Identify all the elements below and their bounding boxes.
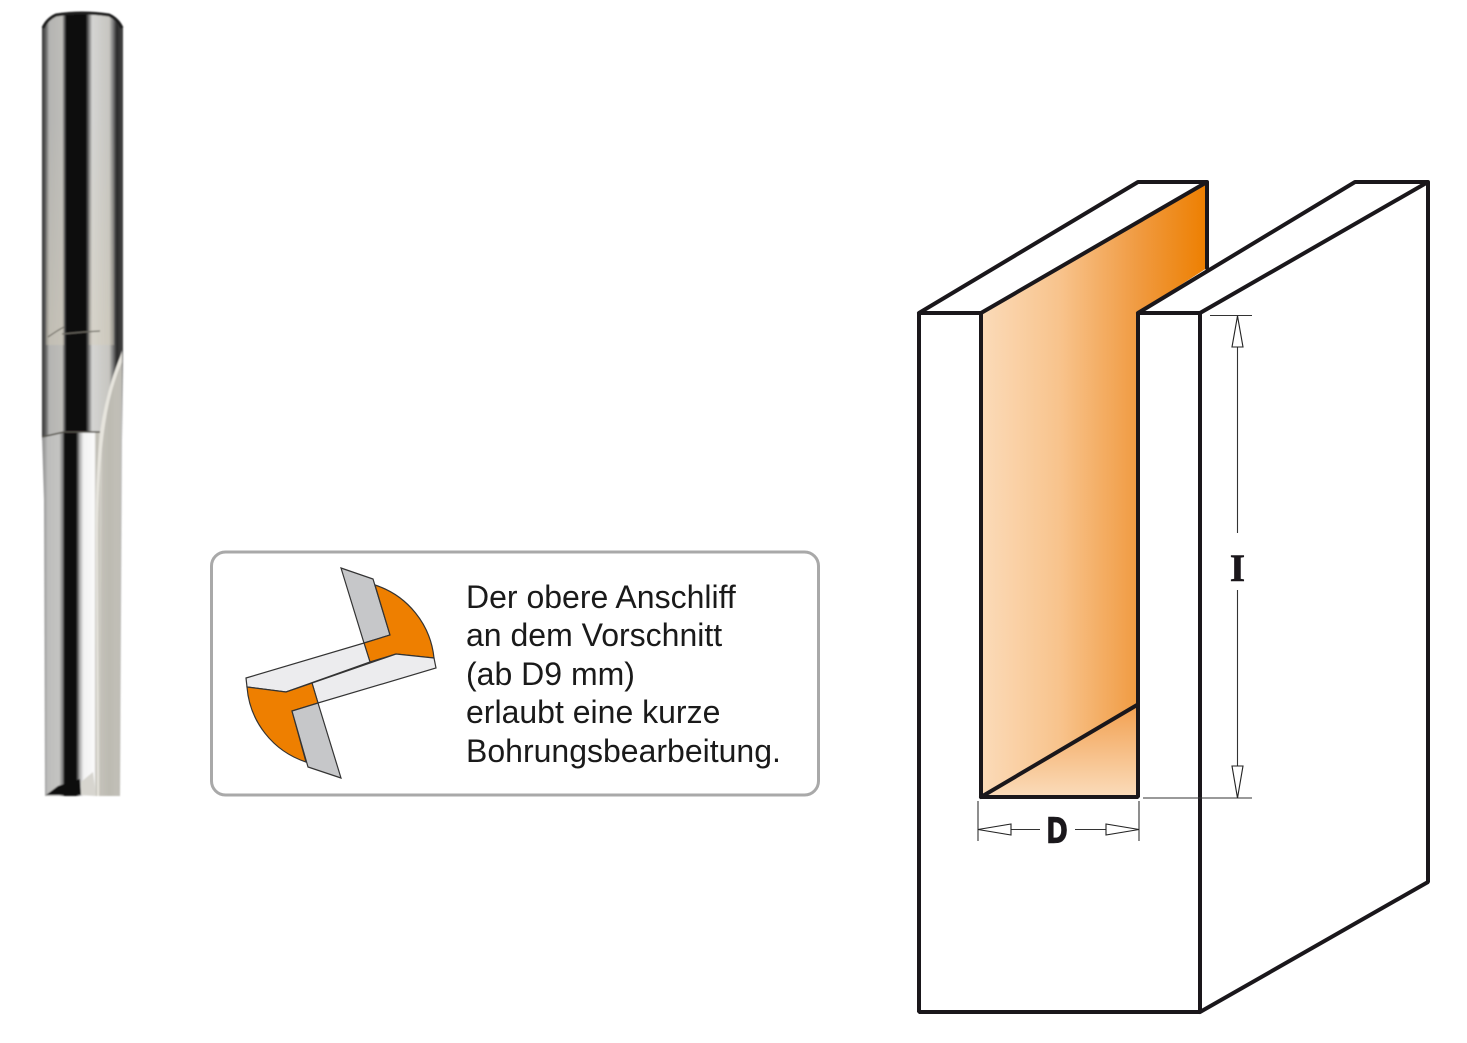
slot back wall — [981, 182, 1207, 797]
flute highlight — [96, 352, 122, 796]
callout text: Bohrungsbearbeitung. — [466, 733, 781, 769]
photo: router bit — [42, 12, 123, 796]
shank patina — [46, 120, 114, 345]
dimension: depth I — [1143, 316, 1252, 798]
workpiece outline — [919, 182, 1428, 1012]
upper light band — [246, 643, 370, 692]
dimension: diameter D — [978, 801, 1139, 852]
panel frame — [212, 552, 818, 795]
cutting section — [42, 350, 122, 796]
tip facet — [81, 772, 96, 796]
label D: D — [1046, 811, 1068, 852]
slot floor — [981, 705, 1137, 797]
upper carbide tip — [341, 568, 390, 643]
diameter dimension lines — [978, 801, 1139, 841]
callout text: Der obere Anschliff — [466, 579, 736, 615]
bit shank — [42, 12, 123, 440]
depth dimension lines — [1143, 316, 1252, 798]
flute shading — [100, 356, 122, 796]
arrow: bottom — [1232, 766, 1243, 798]
callout text: erlaubt eine kurze — [466, 694, 720, 730]
label I: I — [1230, 547, 1245, 590]
arrow: left — [978, 824, 1011, 835]
callout text: (ab D9 mm) — [466, 656, 635, 692]
grind mark — [48, 327, 100, 337]
callout panel — [212, 552, 818, 795]
upper orange body — [364, 585, 434, 662]
diagram: slot in workpiece — [919, 182, 1428, 1012]
shank top edge — [43, 13, 122, 28]
lower light band — [312, 654, 436, 703]
lower carbide tip — [292, 703, 341, 778]
arrow: top — [1232, 316, 1243, 347]
icon: cutter cross-section — [246, 568, 436, 778]
arrow: right — [1106, 824, 1139, 835]
shoulder line — [42, 432, 100, 437]
callout text: an dem Vorschnitt — [466, 617, 722, 653]
tip cut — [46, 779, 81, 795]
lower orange body — [247, 683, 318, 762]
